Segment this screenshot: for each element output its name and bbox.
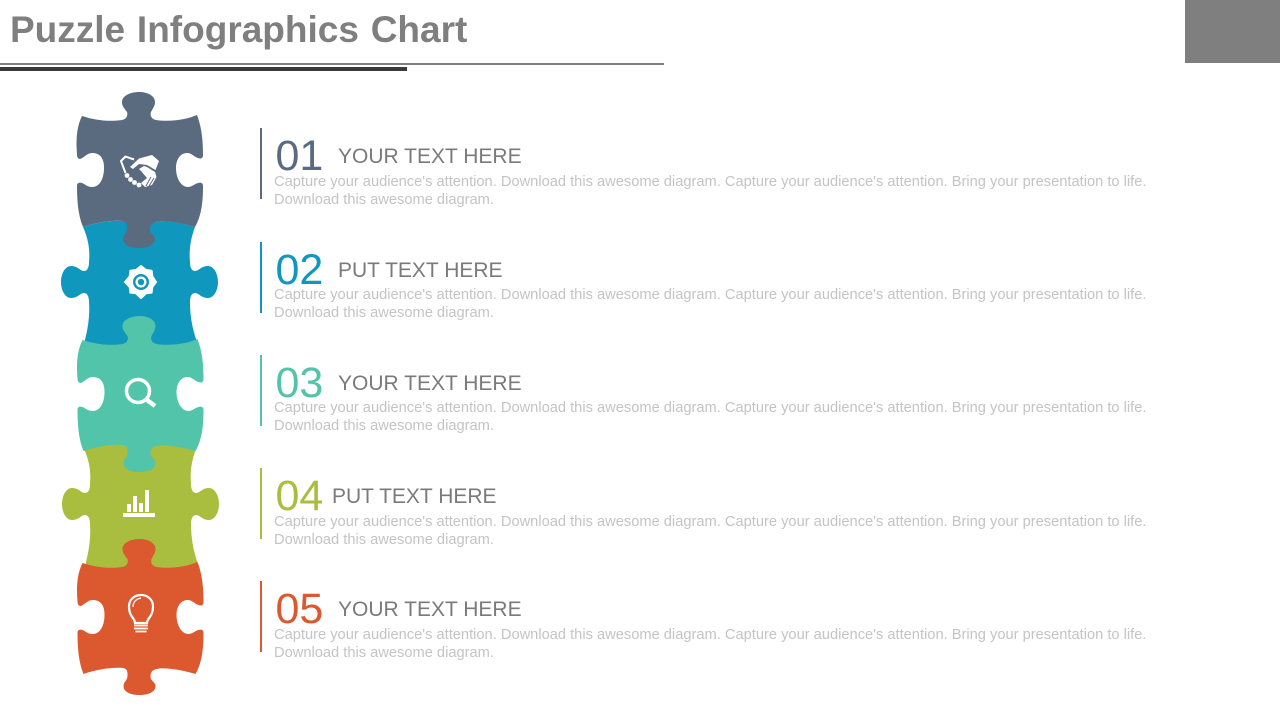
icon: gear [125, 266, 156, 298]
heading 02: PUT TEXT HERE [338, 258, 503, 282]
body text 03 [274, 400, 1146, 434]
accent bar 05 [260, 581, 262, 652]
body text 02 [274, 287, 1146, 321]
icon: handshake [121, 155, 159, 187]
number 04: 04 [276, 472, 323, 520]
icon: light bulb [129, 595, 153, 632]
heading 03: YOUR TEXT HERE [338, 372, 522, 394]
top right grey block [1185, 0, 1280, 63]
puzzle piece 2: blue [61, 221, 218, 346]
item 05 [260, 581, 1146, 661]
number 03: 03 [276, 359, 323, 407]
number 05: 05 [276, 585, 323, 633]
body text 05 [274, 627, 1146, 661]
body text 02: Download this awesome diagram. [274, 305, 494, 321]
body text 04: Capture your audience's attention. Download this awesome diagram. Capture your audience's attention. Bring your presentation to life. [274, 514, 1146, 530]
puzzle piece 5: red-orange [77, 539, 204, 695]
heading 04: PUT TEXT HERE [332, 484, 497, 508]
title underline thick [0, 67, 407, 71]
body text 03: Download this awesome diagram. [274, 418, 494, 434]
body text 05: Download this awesome diagram. [274, 645, 494, 661]
item 04 [260, 468, 1146, 548]
icon: bar chart [123, 490, 155, 517]
title: Puzzle Infographics Chart [10, 9, 467, 50]
body text 04 [274, 514, 1146, 548]
body text 04: Download this awesome diagram. [274, 532, 494, 548]
body text 05: Capture your audience's attention. Download this awesome diagram. Capture your audience's attention. Bring your presentation to life. [274, 627, 1146, 643]
body text 02: Capture your audience's attention. Download this awesome diagram. Capture your audience's attention. Bring your presentation to life. [274, 287, 1146, 303]
accent bar 04 [260, 468, 262, 539]
item 01 [260, 128, 1146, 208]
accent bar 02 [260, 242, 262, 313]
puzzle stack [61, 92, 219, 695]
body text 01: Capture your audience's attention. Download this awesome diagram. Capture your audience's attention. Bring your presentation to life. [274, 174, 1146, 190]
heading 05: YOUR TEXT HERE [338, 598, 522, 620]
accent bar 03 [260, 355, 262, 426]
item 03 [260, 355, 1146, 434]
puzzle piece 4: olive [62, 443, 219, 568]
puzzle piece 3: teal [77, 316, 204, 472]
icon: magnifier [126, 380, 155, 406]
heading 01: YOUR TEXT HERE [338, 144, 522, 168]
number 01: 01 [276, 132, 323, 180]
item 02 [260, 242, 1146, 321]
title underline [0, 63, 664, 65]
body text 01 [274, 174, 1146, 208]
accent bar 01 [260, 128, 262, 199]
body text 03: Capture your audience's attention. Download this awesome diagram. Capture your audience's attention. Bring your presentation to life. [274, 400, 1146, 416]
number 02: 02 [276, 246, 323, 294]
puzzle piece 1: slate [77, 92, 203, 248]
body text 01: Download this awesome diagram. [274, 192, 494, 208]
